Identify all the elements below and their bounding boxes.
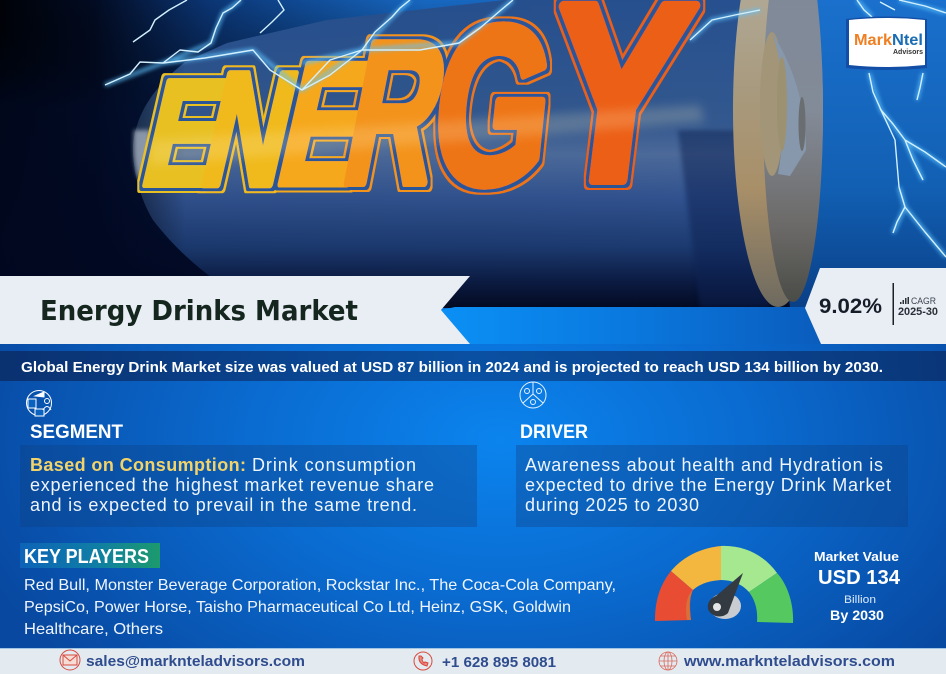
gauge hub <box>709 593 741 619</box>
heading: segment: SEGMENT <box>30 422 123 443</box>
gauge needle <box>708 573 743 616</box>
gauge light green segment <box>721 546 777 592</box>
logo: MarkNtel Advisors: Mark <box>854 32 892 49</box>
icon: small bars <box>900 297 909 304</box>
key players list: PepsiCo, Power Horse, Taisho Pharmaceutical Co Ltd, Heinz, GSK, Goldwin <box>24 599 571 616</box>
icon: email <box>60 650 80 670</box>
can body <box>133 0 790 308</box>
ENERGY lettering on can: R <box>329 1 463 227</box>
key players list: Red Bull, Monster Beverage Corporation, Rockstar Inc., The Coca-Cola Company, <box>24 577 616 594</box>
title banner <box>0 276 470 344</box>
icon: driver people circle <box>520 382 546 408</box>
market value: By 2030 <box>830 608 884 623</box>
title: Energy Drinks Market <box>40 294 358 327</box>
market value: USD 134 <box>818 567 901 589</box>
panel: driver text: expected to drive the Energy Drink Market <box>525 475 891 495</box>
website: www.marknteladvisors.com <box>683 653 895 670</box>
market value: Billion <box>844 594 876 606</box>
heading: key players: KEY PLAYERS <box>24 546 149 568</box>
gauge green segment <box>749 573 793 623</box>
email: sales@marknteladvisors.com <box>86 653 305 670</box>
gauge red segment <box>655 571 693 621</box>
CAGR value: 9.02% <box>819 295 882 318</box>
ENERGY lettering on can: E <box>263 27 388 222</box>
panel: blue content background <box>0 300 946 650</box>
ENERGY lettering on can: E <box>130 48 245 217</box>
panel: segment text: and is expected to prevail in the same trend. <box>30 495 417 515</box>
can left highlight <box>134 130 150 178</box>
market value: Market Value <box>814 549 899 564</box>
CAGR badge <box>805 268 946 344</box>
segment highlight: Based on Consumption: <box>30 455 246 475</box>
panel: driver text: during 2025 to 2030 <box>525 495 699 515</box>
icon: segment globe <box>26 390 52 416</box>
panel: segment text: Drink consumption <box>252 455 416 475</box>
gauge chart <box>655 546 793 623</box>
CAGR label: CAGR <box>911 296 936 307</box>
summary strip: Global Energy Drink Market size was valued at USD 87 billion in 2024 and is projected to reach USD 134 billion by 2030. <box>21 360 883 376</box>
can rim <box>733 0 823 307</box>
panel: driver text: Awareness about health and Hydration is <box>525 455 883 475</box>
logo: MarkNtel Advisors: Advisors <box>893 47 923 56</box>
can shadow near rim <box>678 130 770 307</box>
icon: web globe <box>659 652 677 670</box>
panel: segment text: experienced the highest market revenue share <box>30 475 434 495</box>
market value <box>814 549 901 623</box>
ENERGY lettering on can <box>130 0 706 234</box>
key players list <box>24 577 616 638</box>
icon: phone <box>414 652 432 670</box>
heading: driver: DRIVER <box>520 422 588 443</box>
panel: blue wedge behind title notch <box>441 307 822 344</box>
key players list: Healthcare, Others <box>24 621 163 638</box>
lightning bolts <box>105 0 946 257</box>
can highlight band <box>150 105 705 165</box>
gauge yellow segment <box>671 546 721 590</box>
panel: hero image of energy can <box>0 0 946 308</box>
panel: driver text <box>516 445 908 527</box>
logo: MarkNtel Advisors <box>846 16 927 70</box>
CAGR period: 2025-30 <box>898 306 938 318</box>
panel: segment text <box>20 445 477 527</box>
lid recess <box>760 32 784 176</box>
logo: MarkNtel Advisors: Ntel <box>892 32 923 49</box>
ENERGY lettering on can: N <box>188 40 312 220</box>
footer contact bar <box>0 648 946 674</box>
summary strip <box>0 351 946 381</box>
phone: +1 628 895 8081 <box>442 654 556 671</box>
